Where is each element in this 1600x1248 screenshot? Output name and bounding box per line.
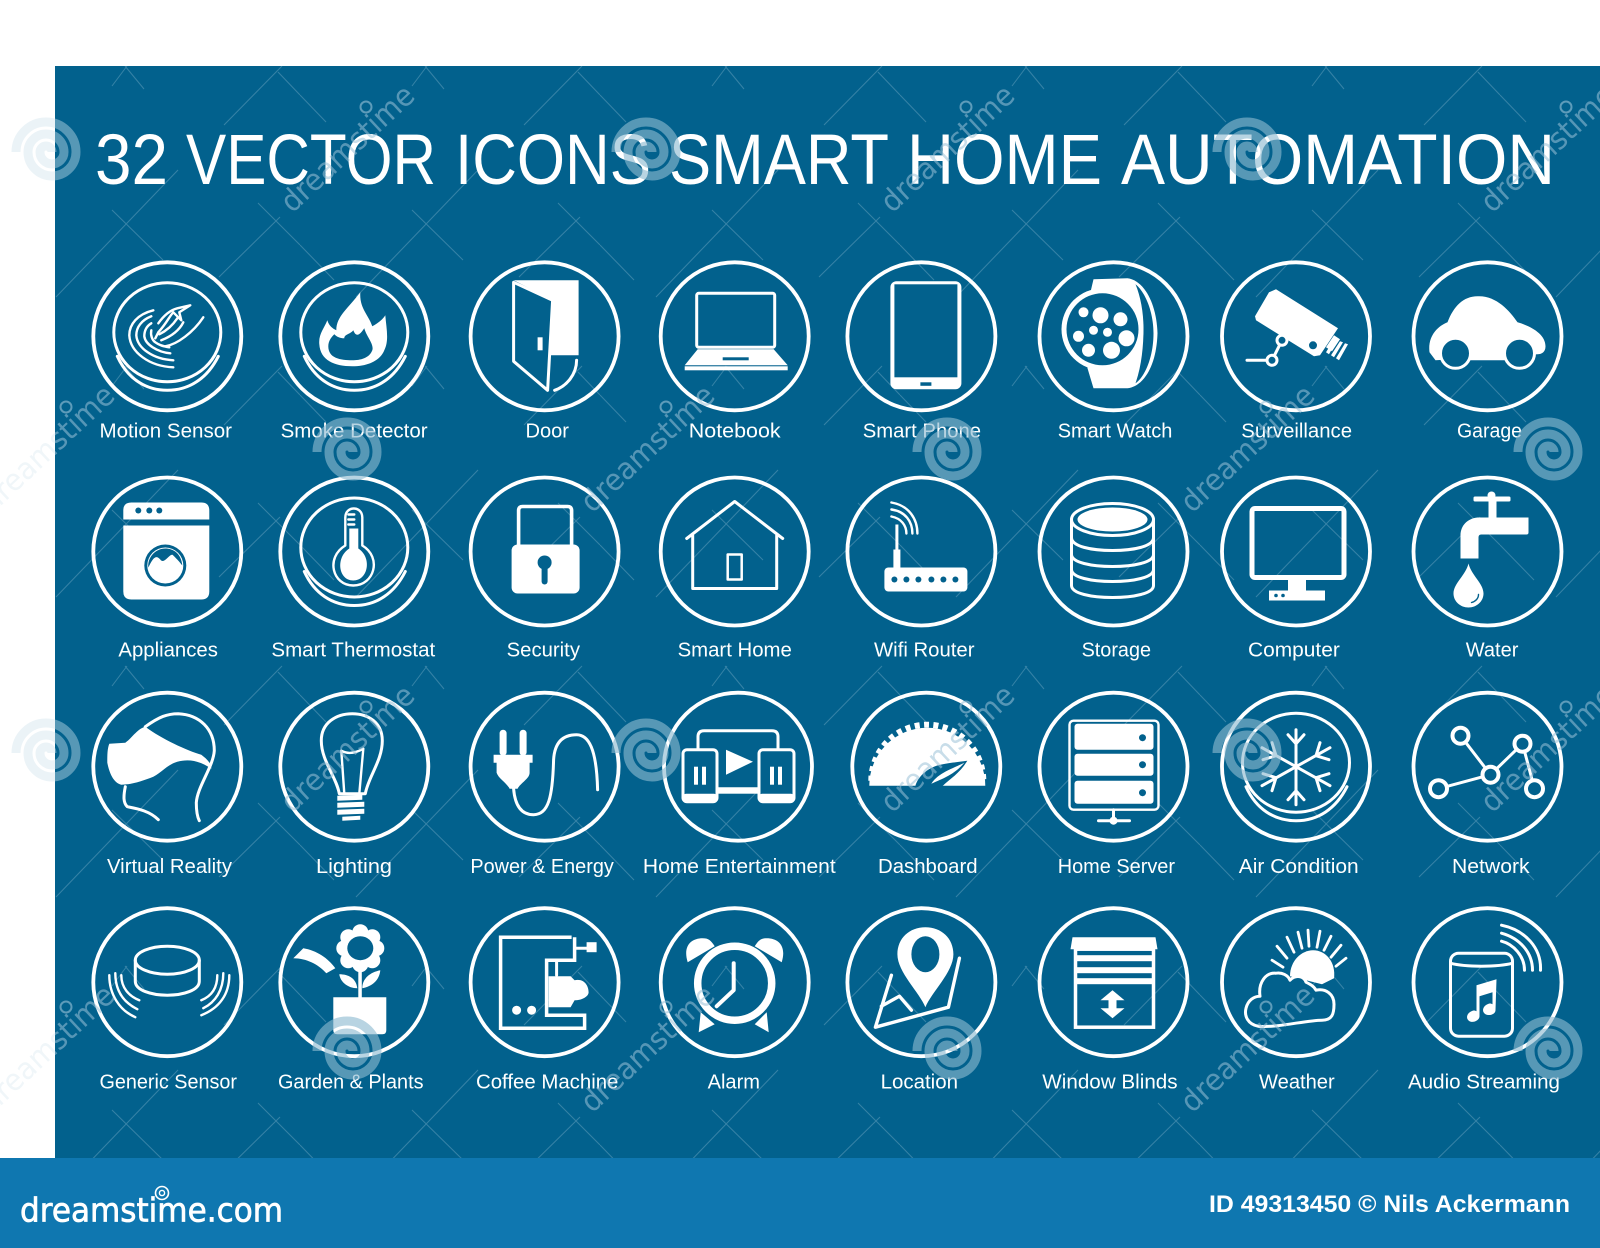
label: Home Server [1058,856,1175,878]
title: SMART [669,121,889,200]
icon: house [661,478,809,626]
footer logo: dreamstime.com [20,1190,283,1230]
label: Audio Streaming [1408,1071,1560,1093]
icon: laptop [661,262,809,410]
watermark words: dreamstime [274,78,422,220]
panel: Network [1414,693,1562,878]
panel: Virtual Reality [93,693,241,878]
label: Surveillance [1241,421,1352,443]
watermark words: dreamstime [274,678,422,820]
label: Home Entertainment [643,856,836,878]
watermark words: dreamstime [1174,978,1322,1120]
label: Door [526,421,569,443]
icon: VR headset [93,693,241,841]
icon: motion sensor [93,262,241,410]
footer credit: ID 49313450 © Nils Ackermann [1209,1191,1570,1218]
label: Weather [1259,1071,1335,1093]
panel: Appliances [93,478,241,662]
label: Dashboard [878,856,978,878]
title: VECTOR [186,121,436,200]
icon: window blinds [1040,908,1188,1056]
label: Security [507,640,580,662]
title [95,121,1555,200]
panel: Wifi Router [847,478,995,662]
icon: network nodes [1414,693,1562,841]
title: AUTOMATION [1121,121,1555,200]
label: Network [1452,856,1531,878]
label: Smart Watch [1058,421,1172,443]
panel: Home Entertainment [643,693,836,878]
label: Alarm [708,1071,760,1093]
label: Motion Sensor [100,421,232,443]
label: Smart Thermostat [271,640,436,662]
label: Storage [1082,640,1151,662]
panel: Alarm [661,908,809,1093]
watermark words: dreamstime [574,378,722,520]
icon: door [471,262,619,410]
icon: gauge [852,693,1000,841]
icon: light bulb [280,693,428,841]
panel: Location [847,908,995,1093]
icon: plug and cable [471,693,619,841]
icon: flame detector [280,262,428,410]
footer bar [0,1158,1600,1248]
icon: monitor [1222,478,1370,626]
panel: Notebook [661,262,809,443]
pale wash over the white margin [0,66,55,1158]
label: Smart Phone [863,421,981,443]
panel: Garden & Plants [278,908,428,1093]
title: 32 [95,121,168,200]
watermark small spiral marks [60,102,1572,1012]
icon: wifi router [847,478,995,626]
watermark words: dreamstime [574,978,722,1120]
label: Wifi Router [874,640,975,662]
label: Garage [1457,421,1522,443]
panel: Surveillance [1222,262,1370,443]
label: Location [881,1071,958,1093]
title: HOME [907,121,1102,200]
icon: snowflake AC [1222,693,1370,841]
icon: car [1414,262,1562,410]
panel: Motion Sensor [93,262,241,443]
panel: Garage [1414,262,1562,443]
icon: smartphone [847,262,995,410]
label: Air Condition [1239,856,1359,878]
panel: Smart Watch [1040,262,1188,443]
icon: media devices [664,693,812,841]
panel: Power & Energy [470,693,619,878]
icon: map pin [847,908,995,1056]
icon: smart watch [1040,262,1188,410]
label: Power & Energy [470,856,614,878]
panel: Dashboard [852,693,1000,878]
label: Window Blinds [1042,1071,1178,1093]
panel: Storage [1040,478,1188,662]
label: Smart Home [678,640,792,662]
panel: Smart Phone [847,262,995,443]
icon: thermostat [280,478,428,626]
icon: audio device [1414,908,1562,1056]
icon: washing machine [93,478,241,626]
icon: padlock [471,478,619,626]
panel: Audio Streaming [1408,908,1562,1093]
panel: Computer [1222,478,1370,662]
label: Generic Sensor [100,1071,237,1093]
panel: Home Server [1040,693,1188,878]
label: Virtual Reality [107,856,232,878]
icon: sun and cloud [1222,908,1370,1056]
label: Computer [1248,640,1340,662]
panel: Air Condition [1222,693,1370,878]
label: Notebook [689,421,782,443]
icon: database [1040,478,1188,626]
panel: Water [1414,478,1562,662]
panel: Smart Thermostat [271,478,436,662]
icon: generic sensor [93,908,241,1056]
panel: Smoke Detector [280,262,428,443]
icon: security camera [1222,262,1370,410]
icon: potted flower [280,908,428,1056]
watermark spirals [16,122,1578,1075]
label: Coffee Machine [476,1071,618,1093]
panel: Window Blinds [1040,908,1188,1093]
icon: faucet and drop [1414,478,1562,626]
icon: alarm clock [661,908,809,1056]
title: ICONS [455,121,651,200]
label: Lighting [316,856,392,878]
icon: coffee machine [471,908,619,1056]
label: Appliances [118,640,218,662]
panel: Lighting [280,693,428,878]
icon: server rack [1040,693,1188,841]
panel: Coffee Machine [471,908,619,1093]
panel: Smart Home [661,478,809,662]
panel: Generic Sensor [93,908,241,1093]
watermark words: dreamstime [1174,378,1322,520]
label: Garden & Plants [278,1071,424,1093]
watermark words: dreamstime [874,678,1022,820]
label: Smoke Detector [281,421,428,443]
label: Water [1466,640,1519,662]
panel: Security [471,478,619,662]
watermark words: dreamstime [874,78,1022,220]
panel: Weather [1222,908,1370,1093]
panel: Door [471,262,619,443]
